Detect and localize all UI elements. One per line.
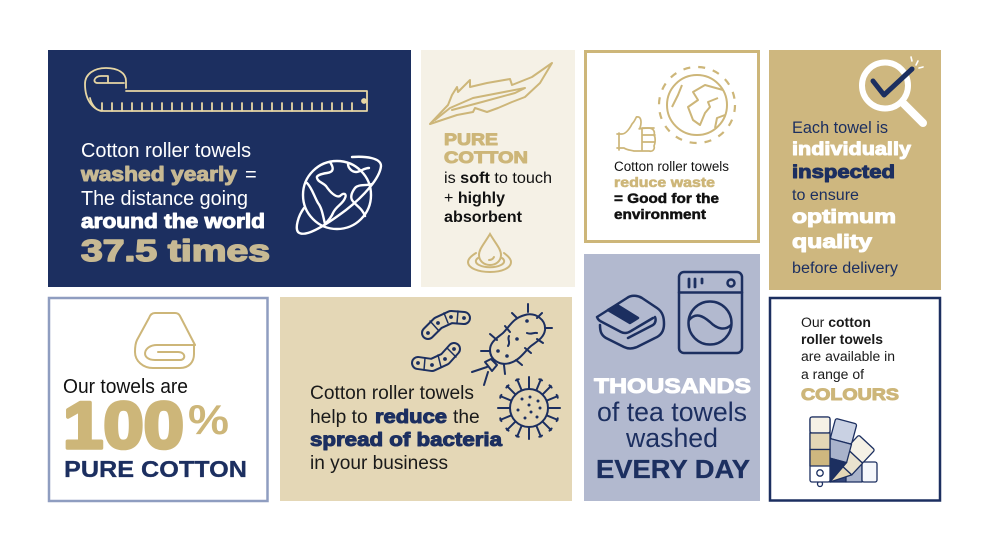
- text: thousands washed: THOUSANDS: [594, 375, 751, 398]
- text: colours: Our cotton: [801, 315, 871, 330]
- text: colours: COLOURS: [801, 386, 899, 404]
- text: reduce waste: = Good for the: [614, 191, 720, 206]
- text: pure cotton: PURE: [444, 130, 498, 149]
- text: inspected: quality: [792, 232, 873, 253]
- icon: earth with dashed ring: [659, 67, 735, 143]
- text: reduce waste: environment: [614, 207, 707, 222]
- text: washed yearly: 37.5 times: [81, 233, 270, 268]
- icon: colour swatch fan: [810, 417, 877, 490]
- panel: pure cotton: [421, 50, 575, 287]
- icon: folded towels: [597, 296, 664, 348]
- text: inspected: before delivery: [792, 260, 898, 277]
- text: colours: a range of: [801, 367, 864, 382]
- text: washed yearly: around the world: [81, 211, 265, 233]
- text: pure cotton: [444, 130, 552, 226]
- text: pure cotton: absorbent: [444, 209, 523, 226]
- icon: globe with orbit: [297, 157, 381, 234]
- text: reduce bacteria: [310, 383, 502, 474]
- text: reduce bacteria: reduce: [375, 407, 447, 428]
- text: colours: roller towels: [801, 332, 883, 347]
- text: thousands washed: EVERY DAY: [596, 456, 750, 484]
- text: thousands washed: washed: [625, 423, 718, 453]
- panel: thousands washed: [584, 254, 760, 501]
- text: our towels are: Our towels are: [63, 376, 188, 398]
- text: washed yearly: [80, 140, 270, 268]
- text: reduce bacteria: spread of bacteria: [310, 430, 502, 451]
- text: reduce bacteria: help to: [310, 407, 368, 428]
- text: washed yearly: The distance going: [81, 188, 248, 210]
- text: 100%: %: [188, 396, 229, 443]
- panel: reduce waste: [586, 52, 758, 242]
- icon: feather: [430, 63, 552, 124]
- icon: water drop: [468, 234, 511, 272]
- text: inspected: [792, 118, 912, 277]
- text: reduce waste: [614, 159, 729, 222]
- text: reduce bacteria: Cotton roller towels: [310, 383, 474, 404]
- text: thousands washed: of tea towels: [597, 397, 747, 427]
- icon: thumbs up: [617, 117, 655, 151]
- icon: tape measure: [85, 68, 367, 111]
- text: washed yearly: washed yearly: [80, 164, 238, 186]
- icon: bacteria chains: [416, 311, 466, 370]
- text: 100%: 100: [63, 388, 184, 462]
- panel: reduce bacteria: [280, 297, 572, 501]
- icon: virus: [498, 377, 560, 439]
- text: reduce bacteria: the: [453, 407, 480, 428]
- text: washed yearly: =: [245, 164, 257, 186]
- icon: magnifying glass with check: [862, 57, 923, 123]
- text: colours: are available in: [801, 349, 895, 364]
- text: inspected: individually: [792, 138, 912, 159]
- text: pure cotton: COTTON: [444, 148, 528, 167]
- panel: 100% pure cotton: [49, 298, 268, 501]
- text: pure cotton: is soft to touch: [444, 170, 552, 187]
- text: pure cotton: + highly: [444, 190, 505, 207]
- text: inspected: Each towel is: [792, 118, 888, 137]
- text: inspected: to ensure: [792, 187, 859, 204]
- panel: inspected: [769, 50, 941, 290]
- text: colours: [801, 315, 899, 404]
- text: inspected: optimum: [792, 207, 896, 228]
- panel: colours: [770, 298, 940, 500]
- text: thousands washed: [594, 375, 751, 484]
- icon: bacillus: [472, 304, 552, 385]
- text: washed yearly: Cotton roller towels: [81, 140, 251, 162]
- icon: washing machine: [679, 272, 742, 353]
- icon: rolled towel: [135, 313, 195, 368]
- panel: washed yearly distance: [48, 50, 411, 287]
- text: pure cotton: PURE COTTON: [64, 456, 247, 482]
- text: 100%: [63, 388, 229, 462]
- text: reduce bacteria: in your business: [310, 453, 448, 474]
- text: reduce waste: Cotton roller towels: [614, 159, 729, 174]
- text: reduce waste: reduce waste: [614, 175, 716, 190]
- text: inspected: inspected: [792, 161, 895, 182]
